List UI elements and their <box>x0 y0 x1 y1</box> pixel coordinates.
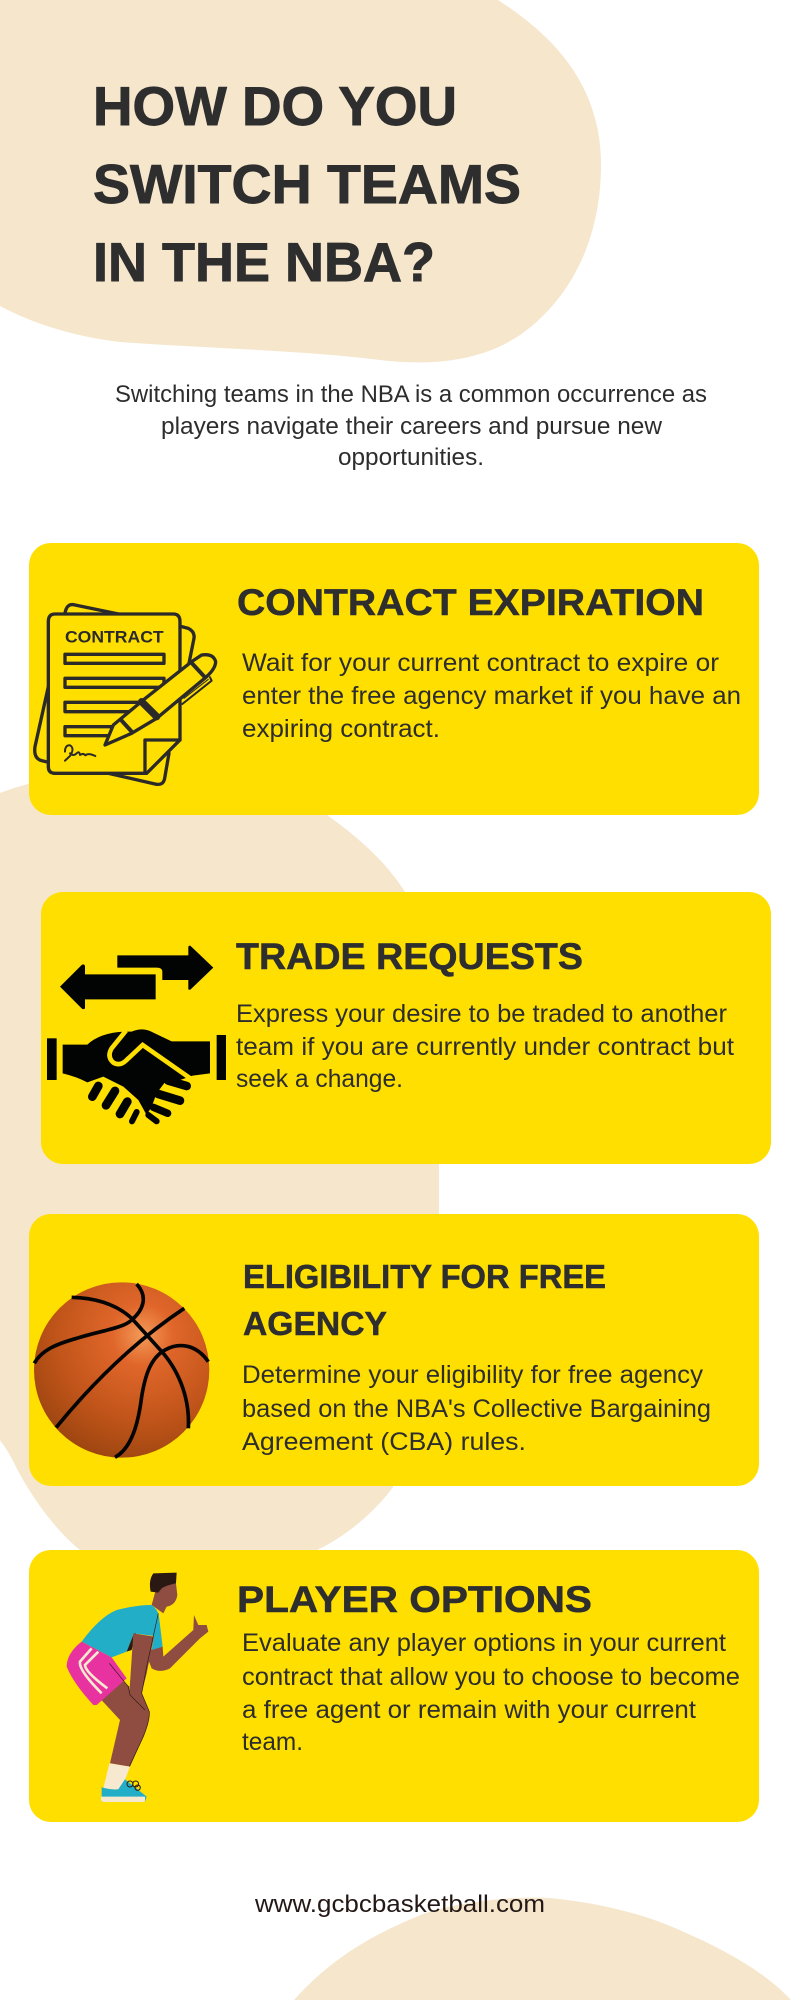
body text: a free agent or remain with your current <box>242 1696 696 1724</box>
title: IN THE NBA? <box>93 232 435 293</box>
intro text: Switching teams in the NBA is a common occurrence as <box>115 381 707 408</box>
intro text: players navigate their careers and pursue new <box>161 413 663 440</box>
panel: eligibility for free agency <box>29 1214 759 1486</box>
body text <box>236 1000 734 1093</box>
heading: AGENCY <box>243 1305 387 1342</box>
body text: Agreement (CBA) rules. <box>242 1428 526 1456</box>
body text: team if you are currently under contract but <box>236 1033 734 1061</box>
heading: TRADE REQUESTS <box>236 936 583 977</box>
body text <box>242 1361 711 1456</box>
icon: basketball <box>34 1282 209 1458</box>
heading: CONTRACT EXPIRATION <box>237 582 704 623</box>
panel: player options <box>29 1550 759 1822</box>
heading: ELIGIBILITY FOR FREE <box>243 1258 606 1295</box>
title <box>93 76 521 293</box>
body text: Determine your eligibility for free agency <box>242 1361 704 1389</box>
body text: seek a change. <box>236 1065 403 1093</box>
background blob: middle <box>0 771 439 1561</box>
body text: enter the free agency market if you have an <box>242 682 741 710</box>
icon: contract and pen <box>35 605 216 784</box>
panel: contract expiration <box>29 543 759 815</box>
background blob: bottom <box>294 1898 791 2000</box>
footer website: www.gcbcbasketball.com <box>254 1891 545 1918</box>
body text: expiring contract. <box>242 715 440 743</box>
title: SWITCH TEAMS <box>93 154 521 215</box>
heading <box>243 1258 606 1342</box>
card background <box>29 1550 759 1822</box>
icon: player giving thumbs up <box>67 1573 208 1802</box>
background blob: top <box>0 0 601 362</box>
body text: based on the NBA's Collective Bargaining <box>242 1395 711 1423</box>
body text: Wait for your current contract to expire or <box>242 649 719 677</box>
body text: team. <box>242 1728 303 1756</box>
title: HOW DO YOU <box>93 76 457 137</box>
panel: trade requests <box>41 892 771 1164</box>
card background <box>29 1214 759 1486</box>
body text: Evaluate any player options in your current <box>242 1629 726 1657</box>
body text: contract that allow you to choose to become <box>242 1663 740 1691</box>
body text <box>242 649 741 743</box>
intro text <box>115 381 707 471</box>
intro text: opportunities. <box>338 444 484 471</box>
icon: contract and pen: CONTRACT <box>65 628 164 647</box>
icon: trade arrows and handshake <box>47 946 226 1121</box>
body text: Express your desire to be traded to another <box>236 1000 727 1028</box>
card background <box>29 543 759 815</box>
heading: PLAYER OPTIONS <box>237 1579 592 1620</box>
card background <box>41 892 771 1164</box>
body text <box>242 1629 740 1756</box>
